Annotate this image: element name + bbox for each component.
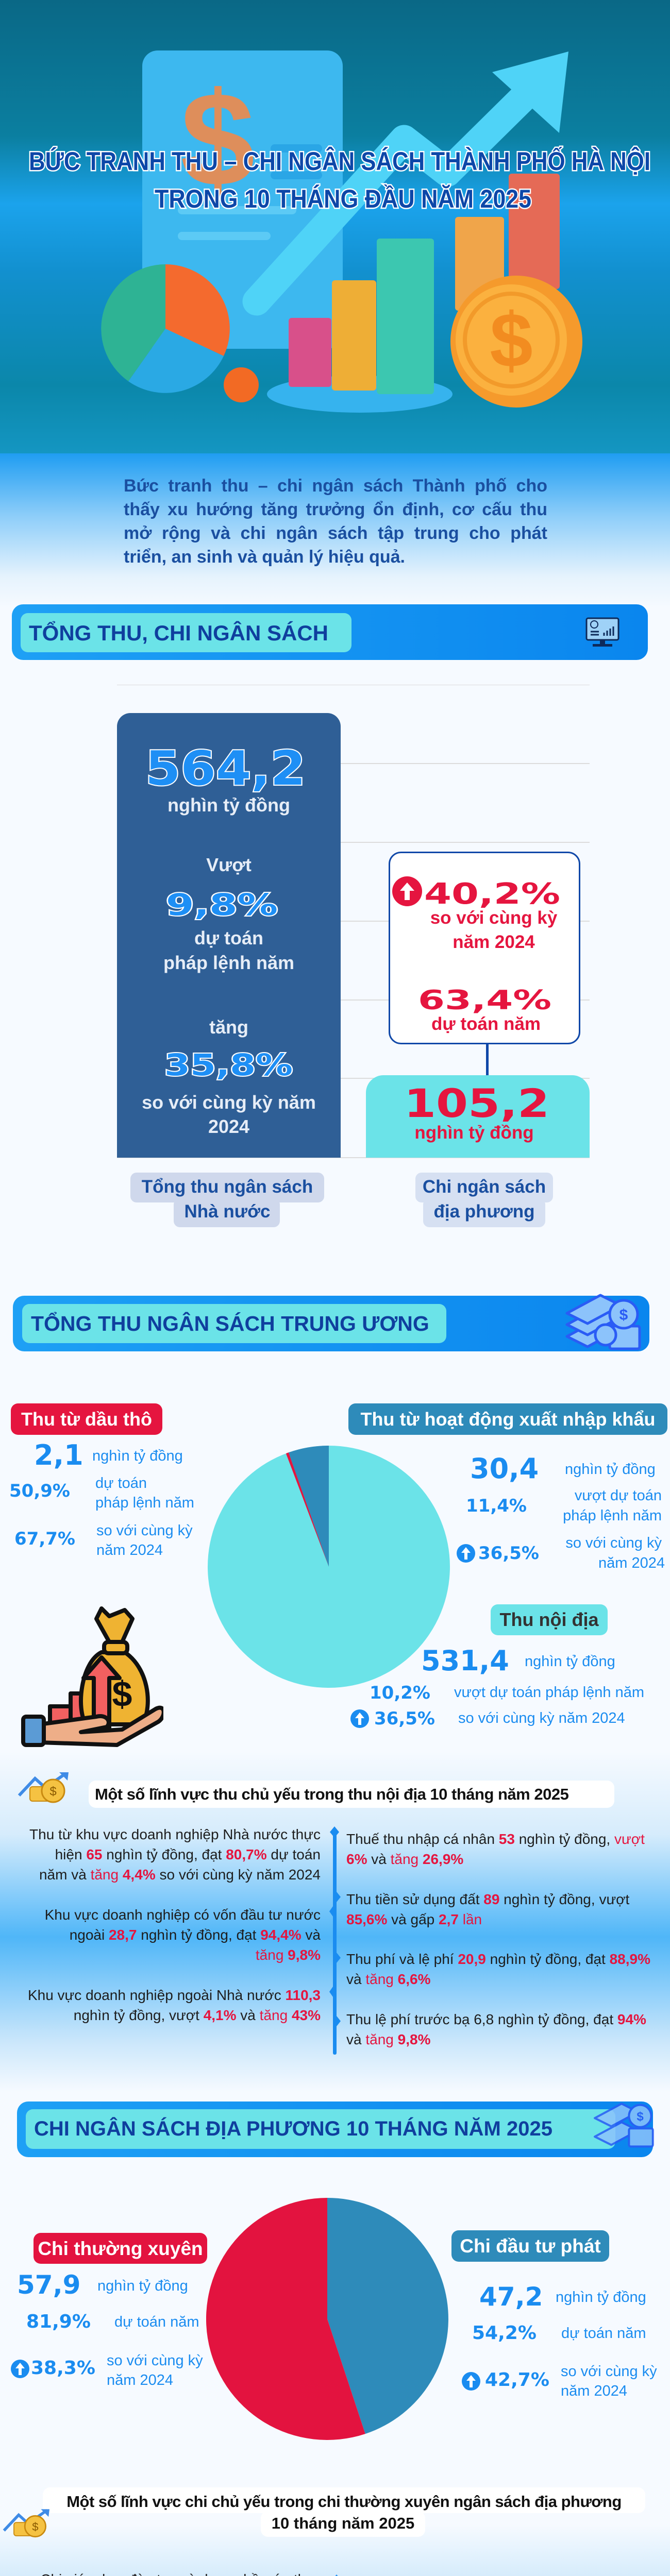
label: thu từ hoạt động xuất nhập khẩu: Thu từ hoạt động xuất nhập khẩu (360, 1409, 656, 1430)
list left: thu nội địa: nghìn tỷ đồng, vượt 4,1% và tăng 43% (74, 2007, 321, 2023)
heading: tổng thu chi: TỔNG THU, CHI NGÂN SÁCH (29, 621, 328, 645)
heading: tổng thu ngân sách trung ương: TỔNG THU NGÂN SÁCH TRUNG ƯƠNG (31, 1312, 429, 1335)
heading: tổng thu chi (21, 613, 351, 652)
header illustration: $ (180, 65, 255, 214)
text: tăng: tăng (209, 1016, 248, 1038)
stats: dầu thô: nghìn tỷ đồng (92, 1448, 183, 1464)
list left: thu nội địa: Khu vực doanh nghiệp ngoài Nhà nước 110,3 (28, 1987, 321, 2003)
icon: coins with arrow: $ (32, 2520, 39, 2533)
stats: chi đầu tư phát: nghìn tỷ đồng (556, 2289, 646, 2306)
subheading: lĩnh vực chi thường xuyên (3, 2487, 645, 2538)
list right: thu nội địa: Thuế thu nhập cá nhân 53 nghìn tỷ đồng, vượt (346, 1831, 645, 1847)
stats: dầu thô: so với cùng kỳ (96, 1522, 193, 1539)
stats: xuất nhập khẩu: năm 2024 (598, 1555, 665, 1571)
callout: chi ngân sách stats (389, 852, 580, 1044)
label: chi thường xuyên: Chi thường xuyên (38, 2238, 203, 2259)
icon: money bag on hand (21, 1606, 163, 1747)
stats: xuất nhập khẩu: so với cùng kỳ (565, 1535, 662, 1551)
stats: xuất nhập khẩu (457, 1452, 665, 1571)
text: nghìn tỷ đồng: nghìn tỷ đồng (167, 794, 290, 816)
stats: chi thường xuyên (11, 2270, 203, 2388)
timeline 2 (335, 2574, 338, 2576)
stats: thu nội địa: so với cùng kỳ năm 2024 (458, 1710, 625, 1726)
icon: monitor (585, 617, 619, 647)
stats: thu nội địa: 10,2% (370, 1683, 430, 1703)
heading: chi ngân sách địa phương (26, 2109, 615, 2149)
stats: chi đầu tư phát: 42,7% (485, 2369, 549, 2391)
stats: chi thường xuyên: so với cùng kỳ (107, 2352, 203, 2369)
icon: money bag on hand: $ (112, 1674, 132, 1714)
stats: chi đầu tư phát: 47,2 (479, 2282, 543, 2312)
subheading: lĩnh vực thu nội địa: Một số lĩnh vực thu chủ yếu trong thu nội địa 10 tháng năm 2025 (95, 1785, 568, 1803)
list right: thu nội địa: 6% và tăng 26,9% (346, 1851, 463, 1867)
text: so với cùng kỳ năm 2024: năm 2024 (453, 932, 535, 952)
text: dự toán năm: dự toán năm (431, 1014, 541, 1034)
text: so với cùng kỳ năm 2024 (430, 908, 558, 952)
list right: thu nội địa (346, 1831, 650, 2047)
icon: money stack small (594, 2103, 654, 2147)
list left: thu nội địa: tăng 9,8% (256, 1947, 321, 1963)
stats: chi đầu tư phát (462, 2282, 657, 2399)
list right: thu nội địa: Thu lệ phí trước bạ 6,8 nghìn tỷ đồng, đạt 94% (346, 2011, 646, 2027)
text: so với cùng kỳ năm 2024 (142, 1092, 316, 1137)
intro text (124, 476, 547, 567)
header illustration: $ (490, 297, 533, 383)
stats: xuất nhập khẩu: pháp lệnh năm (563, 1507, 662, 1524)
label: tổng thu ngân sách nhà nước: Nhà nước (185, 1201, 270, 1222)
intro text: Bức tranh thu – chi ngân sách Thành phố cho (124, 476, 547, 496)
label: chi ngân sách địa phương (415, 1173, 553, 1227)
title (29, 146, 650, 213)
stats: chi đầu tư phát: năm 2024 (561, 2383, 627, 2399)
heading: chi ngân sách địa phương: CHI NGÂN SÁCH ĐỊA PHƯƠNG 10 THÁNG NĂM 2025 (34, 2117, 552, 2140)
section 1 title bar (12, 604, 648, 660)
number: 35,8%: 35,8% (164, 1047, 293, 1082)
stats: dầu thô: pháp lệnh năm (95, 1495, 194, 1511)
timeline 1 (329, 1826, 341, 2055)
label: tổng thu ngân sách nhà nước (130, 1173, 324, 1227)
stats: dầu thô (9, 1439, 194, 1558)
icon: coins with arrow: $ (49, 1785, 57, 1799)
label: thu nội địa: Thu nội địa (500, 1609, 598, 1630)
panel: chi ngân sách địa phương (366, 1075, 590, 1158)
list left: thu nội địa: ngoài 28,7 nghìn tỷ đồng, đạt 94,4% và (70, 1927, 321, 1943)
pie chart: chi ngân sách địa phương (206, 2198, 448, 2440)
panel: tổng thu ngân sách nhà nước (117, 713, 341, 1158)
text: dự toán pháp lệnh năm (163, 927, 294, 973)
label: chi ngân sách địa phương: địa phương (433, 1201, 535, 1222)
subheading: lĩnh vực thu nội địa (18, 1772, 614, 1808)
stats: dầu thô: 2,1 (34, 1439, 83, 1471)
stats: chi đầu tư phát: so với cùng kỳ (561, 2363, 657, 2380)
list left: thu nội địa: hiện 65 nghìn tỷ đồng, đạt 80,7% dự toán (55, 1846, 321, 1862)
label: chi đầu tư phát (451, 2230, 609, 2262)
stats: dầu thô: 67,7% (14, 1529, 75, 1549)
stats: thu nội địa: vượt dự toán pháp lệnh năm (454, 1684, 644, 1701)
text: vượt: Vượt (206, 854, 252, 875)
icon: up arrow circle (392, 876, 422, 906)
stats: chi thường xuyên: 81,9% (26, 2311, 91, 2332)
subheading: lĩnh vực chi thường xuyên: 10 tháng năm 2025 (272, 2514, 414, 2532)
icon: coins with arrow (18, 1772, 69, 1803)
text: so với cùng kỳ năm 2024: so với cùng kỳ năm (142, 1092, 316, 1113)
label: thu từ hoạt động xuất nhập khẩu (348, 1403, 667, 1435)
stats: chi thường xuyên: nghìn tỷ đồng (97, 2278, 188, 2294)
list right: thu nội địa: 85,6% và gấp 2,7 lần (346, 1911, 482, 1927)
stats: thu nội địa: 36,5% (374, 1708, 435, 1729)
label: thu nội địa (491, 1604, 608, 1635)
list right: thu nội địa: và tăng 9,8% (346, 2031, 430, 2047)
header illustration (0, 0, 670, 453)
heading: tổng thu ngân sách trung ương (22, 1304, 446, 1343)
text: dự toán pháp lệnh năm: pháp lệnh năm (163, 952, 294, 973)
stats: xuất nhập khẩu: 11,4% (466, 1496, 527, 1516)
label: chi thường xuyên (34, 2233, 207, 2264)
stats: dầu thô: năm 2024 (96, 1542, 163, 1558)
chart: grid lines (117, 685, 590, 1158)
stats: chi thường xuyên: dự toán năm (114, 2314, 199, 2330)
intro text: mở rộng và chi ngân sách tập trung cho phát (124, 523, 547, 543)
pie chart: thu ngân sách trung ương (208, 1446, 450, 1688)
text: so với cùng kỳ năm 2024: 2024 (208, 1116, 249, 1137)
list left: thu nội địa (28, 1826, 321, 2023)
stats: xuất nhập khẩu: nghìn tỷ đồng (565, 1461, 656, 1478)
icon: money stacks (566, 1294, 641, 1350)
stats: dầu thô: dự toán (95, 1475, 147, 1492)
stats: dầu thô: 50,9% (9, 1481, 70, 1501)
intro text: thấy xu hướng tăng trưởng ổn định, cơ cấu thu (124, 500, 547, 519)
label: tổng thu ngân sách nhà nước: Tổng thu ngân sách (142, 1177, 313, 1197)
stats: thu nội địa (350, 1645, 644, 1729)
text: so với cùng kỳ năm 2024: so với cùng kỳ (430, 908, 557, 928)
intro band (0, 453, 670, 608)
connector (486, 1044, 489, 1076)
stats: xuất nhập khẩu: 30,4 (470, 1452, 539, 1485)
text: dự toán pháp lệnh năm: dự toán (194, 927, 263, 948)
list left: thu nội địa: Khu vực doanh nghiệp có vốn đầu tư nước (45, 1907, 321, 1923)
stats: xuất nhập khẩu: vượt dự toán (575, 1487, 662, 1504)
number: 9,8%: 9,8% (166, 887, 278, 922)
list left: thu nội địa: năm và tăng 4,4% so với cùng kỳ năm 2024 (39, 1867, 321, 1883)
stats: chi thường xuyên: năm 2024 (107, 2372, 173, 2388)
label: chi ngân sách địa phương: Chi ngân sách (423, 1177, 546, 1197)
title: TRONG 10 THÁNG ĐẦU NĂM 2025 (155, 184, 531, 213)
stats: thu nội địa: nghìn tỷ đồng (525, 1653, 615, 1670)
section 2 title bar (13, 1296, 649, 1351)
stats: thu nội địa: 531,4 (421, 1645, 509, 1677)
text: nghìn tỷ đồng: nghìn tỷ đồng (414, 1123, 534, 1143)
number: 63,4%: 63,4% (418, 985, 551, 1016)
section 3 title bar (17, 2102, 653, 2157)
stats: xuất nhập khẩu: 36,5% (478, 1543, 539, 1564)
stats: chi đầu tư phát: 54,2% (472, 2323, 537, 2344)
subheading: lĩnh vực chi thường xuyên: Một số lĩnh vực chi chủ yếu trong chi thường xuyên ngân sách địa phương (66, 2493, 622, 2511)
stats: chi thường xuyên: 57,9 (17, 2270, 80, 2300)
label: thu từ dầu thô: Thu từ dầu thô (21, 1409, 152, 1430)
icon: coins with arrow (3, 2509, 49, 2538)
label: thu từ dầu thô (11, 1403, 162, 1435)
icon: money stack small: $ (636, 2110, 644, 2124)
list right: thu nội địa: Thu tiền sử dụng đất 89 nghìn tỷ đồng, vượt (346, 1891, 629, 1907)
label: chi đầu tư phát: Chi đầu tư phát (460, 2235, 601, 2257)
stats: chi thường xuyên: 38,3% (31, 2358, 95, 2379)
list right: thu nội địa: và tăng 6,6% (346, 1971, 430, 1987)
icon: money stacks: $ (619, 1307, 628, 1324)
intro text: triển, an sinh và quản lý hiệu quả. (124, 547, 405, 567)
list left: thu nội địa: Thu từ khu vực doanh nghiệp Nhà nước thực (29, 1826, 321, 1842)
stats: chi đầu tư phát: dự toán năm (561, 2325, 646, 2342)
list right: thu nội địa: Thu phí và lệ phí 20,9 nghìn tỷ đồng, đạt 88,9% (346, 1951, 650, 1967)
